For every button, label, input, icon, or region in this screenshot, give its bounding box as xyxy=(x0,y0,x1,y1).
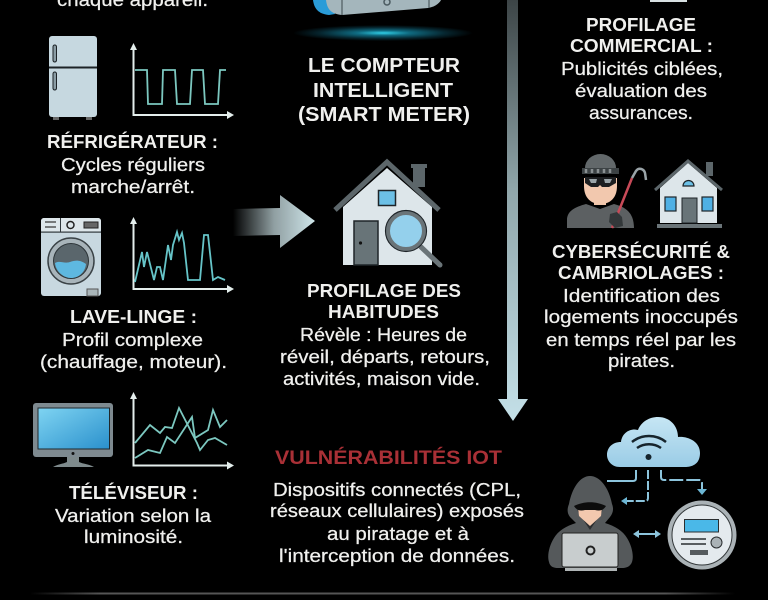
text: washing machine: LAVE-LINGE : xyxy=(70,307,197,327)
icon: hacker with laptop xyxy=(548,476,633,571)
text: cybersecurity: CAMBRIOLAGES : xyxy=(558,263,724,283)
text: habit profiling: PROFILAGE DES xyxy=(307,281,461,301)
icon: hacked meter xyxy=(668,500,736,570)
chart: washing machine profile xyxy=(130,217,234,293)
heading: IoT vulnerabilities: VULNÉRABILITÉS IOT xyxy=(275,447,502,469)
text: cybersecurity xyxy=(544,241,738,371)
text: washing machine xyxy=(40,307,227,372)
text: cybersecurity: logements inoccupés xyxy=(544,307,738,327)
chart: refrigerator cycles xyxy=(130,43,234,119)
text: television: luminosité. xyxy=(84,527,183,547)
icon: network connectors xyxy=(607,470,707,538)
text: refrigerator: RÉFRIGÉRATEUR : xyxy=(47,131,218,152)
text: commercial profiling: assurances. xyxy=(589,103,693,123)
text: cybersecurity: pirates. xyxy=(608,351,675,371)
icon: smart meter device xyxy=(293,0,473,41)
icon: washing machine xyxy=(41,218,101,296)
text: television xyxy=(55,482,212,547)
text: commercial profiling: évaluation des xyxy=(575,81,707,101)
text: cybersecurity: en temps réel par les xyxy=(546,330,736,350)
text: habit profiling: réveil, départs, retours, xyxy=(280,347,490,367)
icon: refrigerator xyxy=(49,36,97,120)
text: commercial profiling: Publicités ciblées, xyxy=(561,59,723,79)
divider: bottom rule xyxy=(30,592,735,594)
icon: target house xyxy=(655,161,722,228)
icon: house with magnifier xyxy=(335,162,440,265)
text: refrigerator: Cycles réguliers xyxy=(61,155,205,175)
heading: smart meter: (SMART METER) xyxy=(298,104,470,126)
text: IoT vulnerabilities: au piratage et à xyxy=(327,524,470,544)
text: IoT vulnerabilities: Dispositifs connectés (CPL, xyxy=(273,480,521,500)
panel: risks column xyxy=(544,0,738,571)
heading: smart meter xyxy=(298,55,470,126)
heading: smart meter: LE COMPTEUR xyxy=(308,55,461,77)
icon: cut-off element above heading xyxy=(650,0,687,2)
text: cybersecurity: CYBERSÉCURITÉ & xyxy=(552,241,730,262)
text: IoT vulnerabilities: réseaux cellulaires) exposés xyxy=(270,501,524,521)
text: refrigerator xyxy=(47,131,218,197)
chart: television variation xyxy=(130,392,234,470)
text: washing machine: Profil complexe xyxy=(62,330,203,350)
text: habit profiling: HABITUDES xyxy=(328,302,439,322)
text: cybersecurity: Identification des xyxy=(563,286,720,306)
text: IoT vulnerabilities: l'interception de données. xyxy=(279,546,515,566)
heading: smart meter: INTELLIGENT xyxy=(313,80,453,102)
arrow: appliances to profiling xyxy=(233,195,315,248)
text: television: TÉLÉVISEUR : xyxy=(69,482,198,503)
panel: appliances column xyxy=(33,0,234,547)
icon: television xyxy=(33,403,113,467)
text: refrigerator: marche/arrêt. xyxy=(71,177,195,197)
text: commercial profiling: PROFILAGE xyxy=(586,15,696,35)
text: habit profiling xyxy=(280,281,490,389)
arrow: vertical flow xyxy=(498,0,528,421)
text: IoT vulnerabilities xyxy=(270,480,524,566)
icon: wifi cloud xyxy=(607,417,700,467)
text: television: Variation selon la xyxy=(55,506,212,526)
text: habit profiling: Révèle : Heures de xyxy=(300,325,467,345)
panel: centre column xyxy=(233,0,524,566)
text: habit profiling: activités, maison vide. xyxy=(283,369,480,389)
text: commercial profiling: COMMERCIAL : xyxy=(570,36,713,56)
text: washing machine: (chauffage, moteur). xyxy=(40,352,227,372)
icon: burglar xyxy=(567,154,646,228)
text: commercial profiling xyxy=(561,15,723,123)
